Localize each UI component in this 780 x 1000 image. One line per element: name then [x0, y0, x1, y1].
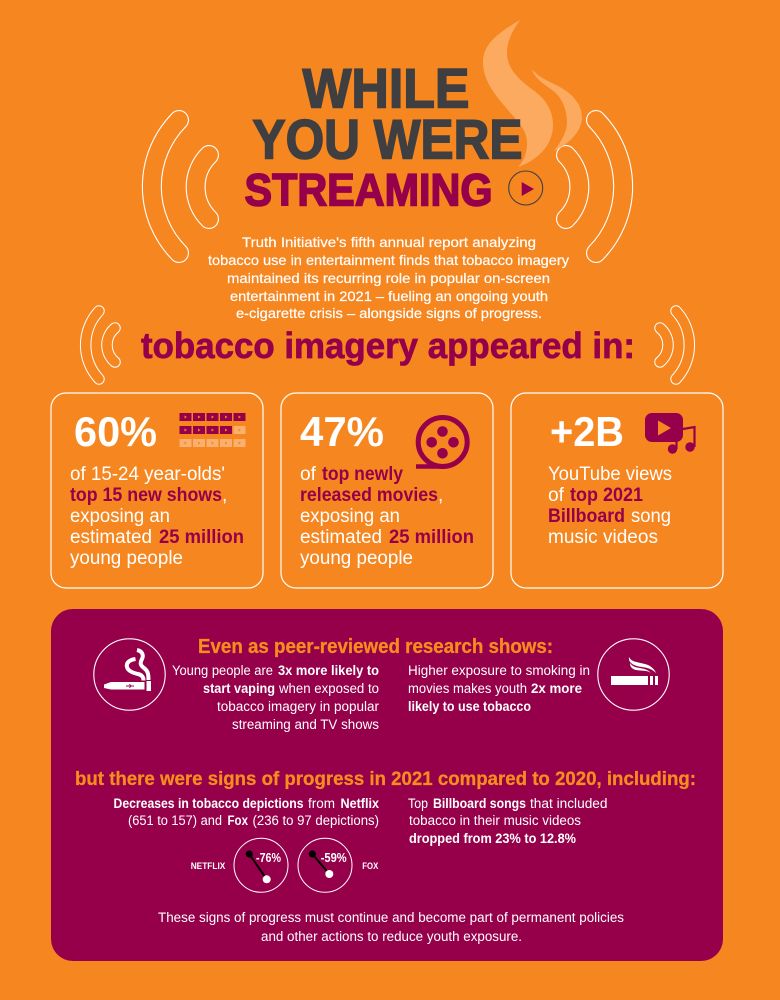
- card text: ,: [438, 485, 443, 506]
- chart: Fox dial: [298, 838, 352, 892]
- icon: left sound waves around title: [152, 120, 209, 253]
- label: Netflix: NETFLIX: [191, 861, 225, 871]
- card text: top 15 new shows: [70, 485, 222, 506]
- text: decreases in depictions: [114, 796, 379, 828]
- intro text: e-cigarette crisis – alongside signs of progress.: [236, 305, 542, 321]
- text: vaping research: Young people are: [172, 663, 273, 678]
- chart: Netflix dial: [234, 838, 288, 892]
- text: Billboard songs: Billboard songs: [433, 796, 526, 811]
- text: vaping research: tobacco imagery in popular: [217, 699, 380, 714]
- text: vaping research: [172, 663, 380, 732]
- text: vaping research: 3x more likely to: [278, 663, 379, 678]
- card text: of 15-24 year-olds': [70, 464, 225, 485]
- text: smoking research: [408, 663, 590, 714]
- card text: Billboard: [548, 506, 625, 527]
- panel: YouTube card: [511, 393, 723, 588]
- card text: exposing an: [70, 506, 170, 527]
- text: vaping research: when exposed to: [278, 681, 379, 696]
- card text: 25 million: [159, 527, 244, 548]
- heading: research: Even as peer-reviewed research shows:: [198, 636, 553, 658]
- text: Billboard songs: that included: [530, 796, 608, 811]
- text: Billboard songs: [408, 796, 608, 846]
- title: WHILE: [302, 56, 470, 119]
- panel: research and progress: [51, 609, 723, 961]
- text: decreases in depictions: from: [308, 796, 335, 811]
- card text: [300, 464, 474, 569]
- text: decreases in depictions: Decreases in tobacco depictions: [114, 796, 304, 811]
- text: smoking research: 2x more: [531, 681, 582, 696]
- icon: left sound waves around subheading: [86, 311, 115, 379]
- card text: [548, 464, 672, 548]
- closing text: and other actions to reduce youth exposure.: [261, 929, 522, 944]
- chart: Fox dial: -59%: [321, 851, 347, 865]
- card text: of: [300, 464, 317, 485]
- closing text: These signs of progress must continue and become part of permanent policies: [158, 910, 624, 925]
- icon: play button: [509, 171, 543, 205]
- panel: shows card: [51, 393, 263, 588]
- panel: movies card: [281, 393, 493, 588]
- card text: music videos: [548, 527, 658, 548]
- text: vaping research: start vaping: [203, 681, 275, 696]
- intro text: Truth Initiative's fifth annual report analyzing: [242, 234, 536, 250]
- card text: released movies: [300, 485, 438, 506]
- stat: +2B: +2B: [550, 408, 624, 455]
- intro text: entertainment in 2021 – fueling an ongoing youth: [230, 288, 548, 304]
- icon: smoke wisps: [483, 20, 582, 167]
- text: decreases in depictions: (651 to 157) and: [128, 813, 222, 828]
- chart: Netflix dial: -76%: [256, 851, 281, 865]
- text: smoking research: movies makes youth: [408, 681, 527, 696]
- title: STREAMING: [244, 164, 492, 215]
- text: vaping research: streaming and TV shows: [232, 717, 379, 732]
- heading: signs of progress: but there were signs of progress in 2021 compared to 2020, including:: [75, 768, 696, 790]
- card text: ,: [222, 485, 227, 506]
- card text: young people: [70, 548, 183, 569]
- card text: estimated: [70, 527, 152, 548]
- text: decreases in depictions: Netflix: [340, 796, 379, 811]
- intro text: maintained its recurring role in popular on-screen: [227, 270, 550, 286]
- card text: [70, 464, 244, 569]
- text: Billboard songs: tobacco in their music videos: [409, 813, 581, 828]
- intro text: [208, 234, 569, 321]
- closing text: [158, 910, 624, 944]
- card text: YouTube views: [548, 464, 672, 485]
- stat: 60%: 60%: [74, 408, 157, 455]
- card text: top newly: [322, 464, 403, 485]
- text: Billboard songs: Top: [408, 796, 428, 811]
- intro text: tobacco use in entertainment finds that tobacco imagery: [208, 252, 569, 268]
- title: [244, 56, 522, 215]
- text: smoking research: Higher exposure to smoking in: [408, 663, 590, 678]
- card text: song: [631, 506, 671, 527]
- icon: video and music notes: [645, 413, 695, 454]
- card text: 25 million: [389, 527, 474, 548]
- stat: 47%: 47%: [300, 408, 384, 455]
- text: Billboard songs: dropped from 23% to 12.8%: [409, 831, 576, 846]
- icon: film reel: [416, 418, 467, 466]
- text: smoking research: likely to use tobacco: [408, 699, 531, 714]
- card text: estimated: [300, 527, 382, 548]
- icon: right sound waves around subheading: [660, 311, 689, 379]
- card text: exposing an: [300, 506, 400, 527]
- icon: grid of shows: [180, 413, 246, 447]
- icon: right sound waves around title: [566, 120, 623, 253]
- icon: vape with smoke: [94, 639, 165, 710]
- text: decreases in depictions: Fox: [228, 813, 248, 828]
- icon: cigarette with smoke: [598, 639, 669, 710]
- card text: young people: [300, 548, 413, 569]
- card text: of: [548, 485, 565, 506]
- text: decreases in depictions: (236 to 97 depictions): [252, 813, 379, 828]
- label: Fox: FOX: [362, 861, 378, 871]
- title: YOU WERE: [252, 107, 522, 170]
- subheading: tobacco imagery appeared in:: [141, 325, 635, 366]
- card text: top 2021: [570, 485, 643, 506]
